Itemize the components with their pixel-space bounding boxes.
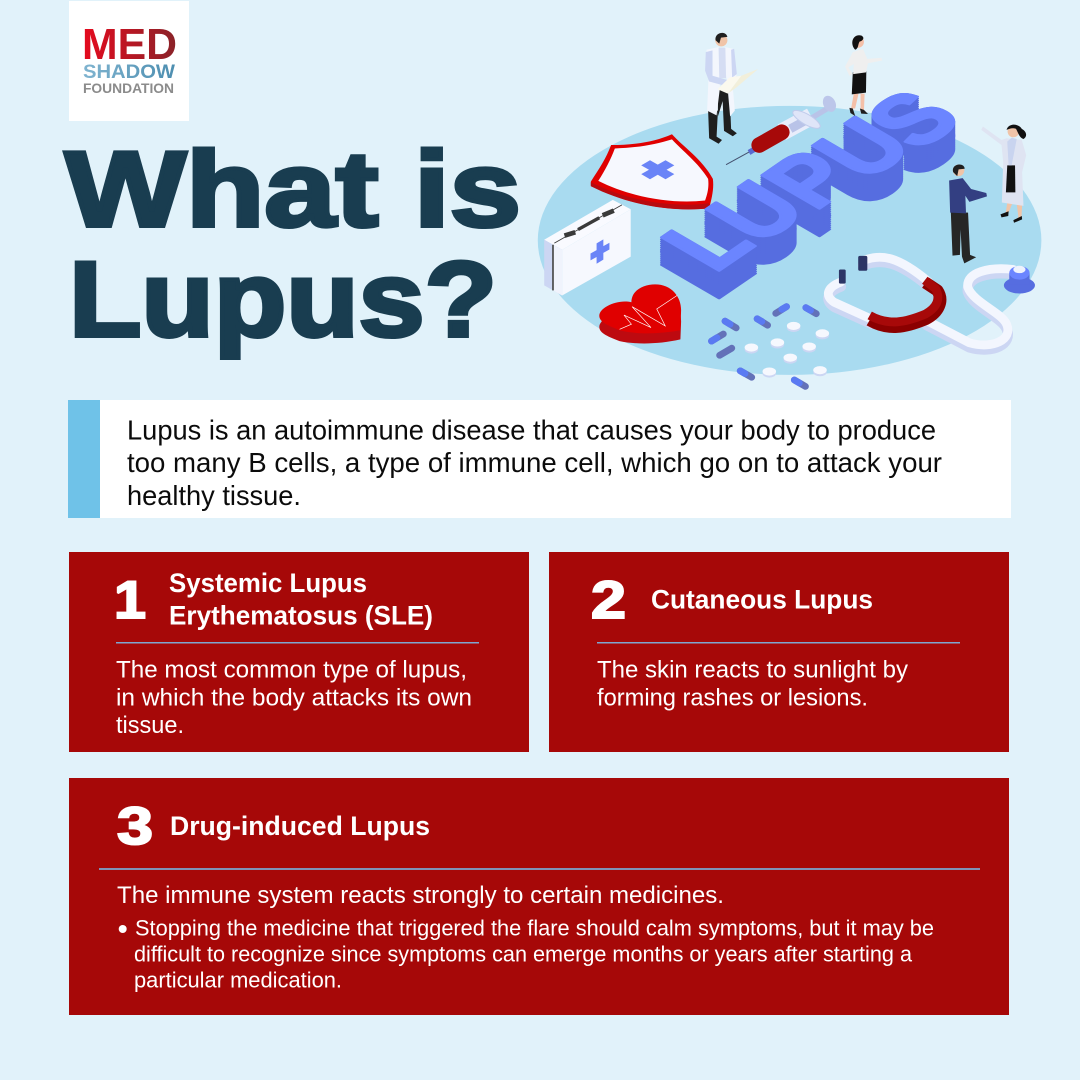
icon: syringe bbox=[726, 94, 839, 165]
figure: doctor with laptop bbox=[705, 33, 758, 144]
panel: cutaneous lupus bbox=[549, 552, 1009, 752]
panel: definition intro bbox=[68, 400, 1011, 518]
illustration: lupus medical scene bbox=[538, 33, 1041, 386]
panel: cutaneous lupus: The skin reacts to sunlight by bbox=[597, 656, 908, 684]
title bbox=[65, 129, 521, 359]
panel: drug-induced lupus: difficult to recognize since symptoms can emerge months or years after starting a bbox=[134, 942, 913, 966]
panel: systemic lupus erythematosus: 1 bbox=[114, 571, 146, 630]
panel: cutaneous lupus: forming rashes or lesions. bbox=[597, 684, 868, 712]
logo: MedShadow Foundation: MED bbox=[82, 20, 177, 69]
figure: man in blue sweater bbox=[949, 165, 987, 263]
icon: capsules bbox=[712, 307, 816, 386]
icon: heart with pulse bbox=[599, 284, 681, 343]
panel: drug-induced lupus: Drug-induced Lupus bbox=[170, 811, 430, 841]
panel: systemic lupus erythematosus: The most common type of lupus, bbox=[116, 656, 467, 684]
LUPUS 3D lettering: U bbox=[684, 167, 829, 256]
panel: drug-induced lupus bbox=[69, 778, 1009, 1015]
illustration backdrop ellipse bbox=[538, 106, 1041, 375]
logo: MedShadow Foundation: FOUNDATION bbox=[83, 81, 174, 96]
icon: stethoscope bbox=[828, 256, 1035, 350]
icon: tablets bbox=[745, 322, 829, 378]
panel: cutaneous lupus: 2 bbox=[591, 571, 626, 630]
title: Lupus? bbox=[69, 239, 497, 359]
title: What is bbox=[65, 129, 521, 249]
LUPUS 3D lettering bbox=[639, 76, 984, 285]
figure: doctor with mask bbox=[981, 125, 1026, 223]
LUPUS 3D lettering: P bbox=[740, 136, 880, 223]
panel: systemic lupus erythematosus bbox=[69, 552, 529, 752]
panel: drug-induced lupus: particular medication. bbox=[134, 968, 342, 992]
panel: definition intro: healthy tissue. bbox=[127, 480, 301, 511]
panel: systemic lupus erythematosus: Erythematosus (SLE) bbox=[169, 600, 433, 630]
panel: drug-induced lupus: The immune system reacts strongly to certain medicines. bbox=[117, 882, 724, 909]
panel: definition intro: too many B cells, a type of immune cell, which go on to attack your bbox=[127, 447, 942, 478]
panel: systemic lupus erythematosus: tissue. bbox=[116, 712, 184, 739]
panel: systemic lupus erythematosus: in which the body attacks its own bbox=[116, 684, 472, 712]
panel: systemic lupus erythematosus: Systemic Lupus bbox=[169, 568, 367, 598]
LUPUS 3D lettering: L bbox=[639, 201, 776, 285]
icon: shield with cross bbox=[591, 134, 713, 209]
panel: drug-induced lupus: 3 bbox=[117, 797, 153, 856]
LUPUS 3D lettering: S bbox=[843, 76, 984, 162]
panel: cutaneous lupus: Cutaneous Lupus bbox=[651, 584, 873, 614]
logo: MedShadow Foundation: SHADOW bbox=[83, 61, 176, 83]
LUPUS 3D lettering: U bbox=[791, 103, 935, 193]
panel: drug-induced lupus: Stopping the medicine that triggered the flare should calm symptoms, but it may be bbox=[135, 916, 934, 940]
icon: medical kit bbox=[544, 200, 631, 295]
panel: definition intro: Lupus is an autoimmune disease that causes your body to produce bbox=[127, 414, 936, 446]
logo: MedShadow Foundation bbox=[69, 1, 189, 121]
figure: woman in white blouse bbox=[845, 35, 882, 116]
